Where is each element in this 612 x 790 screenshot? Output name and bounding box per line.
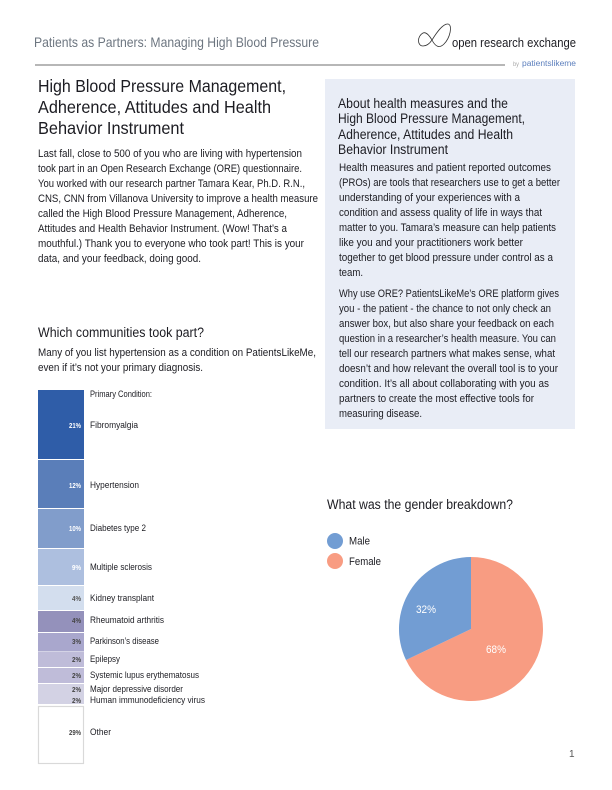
panel paragraph: why use ORE: condition. It’s all about collaborating with you as	[339, 378, 549, 390]
intro text: Attitudes and Health Behavior Instrument. (Wow! That’s a	[38, 223, 288, 235]
panel heading: High Blood Pressure Management,	[338, 111, 525, 126]
panel paragraph: health measures: (PROs) are tools that researchers use to get a better	[339, 177, 560, 189]
bar: Parkinson's disease: 3%	[72, 639, 82, 646]
panel paragraph: health measures: Health measures and patient reported outcomes	[339, 162, 551, 174]
panel paragraph: why use ORE: partners to create the most effective tools for	[339, 393, 534, 405]
panel paragraph: health measures	[339, 162, 560, 279]
bar: Fibromyalgia	[38, 390, 138, 459]
logo: open research exchange: by	[513, 62, 519, 68]
article heading: High Blood Pressure Management,	[38, 76, 286, 96]
intro text: data, and your feedback, doing good.	[38, 253, 201, 265]
bar: Parkinson's disease	[38, 633, 159, 652]
bar: Diabetes type 2: Diabetes type 2	[90, 523, 146, 533]
legend: female: Female	[349, 556, 381, 568]
panel paragraph: health measures: matter to you. Tamara’s measure can help patients	[339, 222, 556, 234]
intro text: Last fall, close to 500 of you who are living with hypertension	[38, 148, 302, 160]
bar: Systemic lupus erythematosus: 2%	[72, 673, 82, 680]
pie chart: gender	[399, 557, 543, 701]
bar: Major depressive disorder and HIV: Major depressive disorder	[90, 684, 183, 694]
panel heading	[338, 96, 525, 157]
chart heading: Primary Condition:	[90, 389, 152, 399]
article heading	[38, 76, 286, 138]
bar: Kidney transplant	[38, 586, 154, 610]
bar: Rheumatoid arthritis	[38, 611, 164, 632]
panel paragraph: why use ORE: measuring disease.	[339, 408, 422, 420]
panel heading: Adherence, Attitudes and Health	[338, 127, 513, 142]
bar: Multiple sclerosis: 9%	[72, 565, 82, 572]
bar: Epilepsy: Epilepsy	[90, 654, 120, 664]
intro text: CNS, CNN from Villanova University to improve a health measure	[38, 193, 318, 205]
pie slice: female 68%	[406, 557, 543, 701]
article heading: Adherence, Attitudes and Health	[38, 97, 271, 117]
bar: Major depressive disorder and HIV: Human immunodeficiency virus	[90, 695, 205, 705]
icon: infinity loop	[418, 24, 451, 47]
bar: Major depressive disorder and HIV: 2%	[72, 687, 82, 694]
header title: Patients as Partners: Managing High Blood Pressure	[34, 34, 319, 50]
panel paragraph: why use ORE	[339, 288, 559, 420]
panel heading: Behavior Instrument	[338, 142, 448, 157]
bar: Diabetes type 2: 10%	[69, 526, 82, 533]
bar: Other	[38, 706, 111, 764]
bar: Systemic lupus erythematosus	[38, 668, 199, 683]
intro text	[38, 148, 318, 265]
legend	[327, 533, 381, 569]
panel paragraph: why use ORE: doesn’t and how relevant the overall tool is to your	[339, 363, 558, 375]
chart: primary condition stacked bar	[38, 389, 205, 764]
panel paragraph: why use ORE: answer box, but also share your feedback on each	[339, 318, 554, 330]
bar: Multiple sclerosis: Multiple sclerosis	[90, 562, 152, 572]
bar: Major depressive disorder and HIV: 2%	[72, 698, 82, 705]
page number: 1	[569, 749, 575, 760]
pie slice: male 32%	[399, 557, 471, 660]
pie slice: female 68%: 68%	[486, 644, 506, 656]
intro text: mouthful.) Thank you to everyone who took part! This is your	[38, 238, 304, 250]
logo: open research exchange	[418, 24, 577, 68]
bar: Kidney transplant: 4%	[72, 596, 82, 603]
bar: Fibromyalgia: Fibromyalgia	[90, 420, 138, 430]
bar: Other: Other	[90, 727, 111, 737]
intro text: took part in an Open Research Exchange (ORE) questionnaire.	[38, 163, 302, 175]
gender heading: What was the gender breakdown?	[327, 497, 513, 512]
bar: Hypertension: Hypertension	[90, 480, 139, 490]
communities heading: Which communities took part?	[38, 325, 204, 340]
intro text: called the High Blood Pressure Management, Adherence,	[38, 208, 287, 220]
panel paragraph: why use ORE: tell our research partners what makes sense, what	[339, 348, 555, 360]
panel heading: About health measures and the	[338, 96, 508, 111]
article heading: Behavior Instrument	[38, 118, 184, 138]
bar: Fibromyalgia: 21%	[69, 423, 82, 430]
panel: about health measures	[325, 79, 575, 429]
bar: Rheumatoid arthritis: Rheumatoid arthritis	[90, 615, 164, 625]
bar: Kidney transplant: Kidney transplant	[90, 593, 154, 603]
communities intro	[38, 347, 316, 374]
panel paragraph: health measures: together to get blood pressure under control as a	[339, 252, 554, 264]
logo: open research exchange: open research exchange	[452, 36, 576, 50]
intro text: You worked with our research partner Tamara Kear, Ph.D. R.N.,	[38, 178, 305, 190]
bar: Hypertension: 12%	[69, 483, 82, 490]
panel paragraph: why use ORE: question in a researcher’s health measure. You can	[339, 333, 556, 345]
legend: male: Male	[349, 536, 370, 548]
bar: Hypertension	[38, 460, 139, 508]
panel paragraph: why use ORE: you - the patient - the chance to not only check an	[339, 303, 551, 315]
bar: Diabetes type 2	[38, 509, 146, 548]
bar: Systemic lupus erythematosus: Systemic lupus erythematosus	[90, 670, 199, 680]
pie slice: male 32%: 32%	[416, 604, 436, 616]
panel paragraph: health measures: understanding of your experiences with a	[339, 192, 521, 204]
panel paragraph: health measures: like you and your practitioners work better	[339, 237, 523, 249]
logo: open research exchange: patientslikeme	[522, 59, 577, 68]
bar: Rheumatoid arthritis: 4%	[72, 618, 82, 625]
bar: Major depressive disorder and HIV	[38, 684, 205, 705]
bar: Epilepsy	[38, 652, 120, 667]
bar: Parkinson's disease: Parkinson’s disease	[90, 636, 159, 646]
bar: Other: 29%	[69, 730, 82, 737]
communities intro: even if it’s not your primary diagnosis.	[38, 362, 203, 374]
bar: Multiple sclerosis	[38, 549, 152, 585]
bar: Epilepsy: 2%	[72, 657, 82, 664]
panel paragraph: health measures: team.	[339, 267, 363, 279]
panel paragraph: why use ORE: Why use ORE? PatientsLikeMe’s ORE platform gives	[339, 288, 559, 300]
communities intro: Many of you list hypertension as a condition on PatientsLikeMe,	[38, 347, 316, 359]
panel paragraph: health measures: condition and assess quality of life in ways that	[339, 207, 542, 219]
header	[34, 24, 577, 68]
